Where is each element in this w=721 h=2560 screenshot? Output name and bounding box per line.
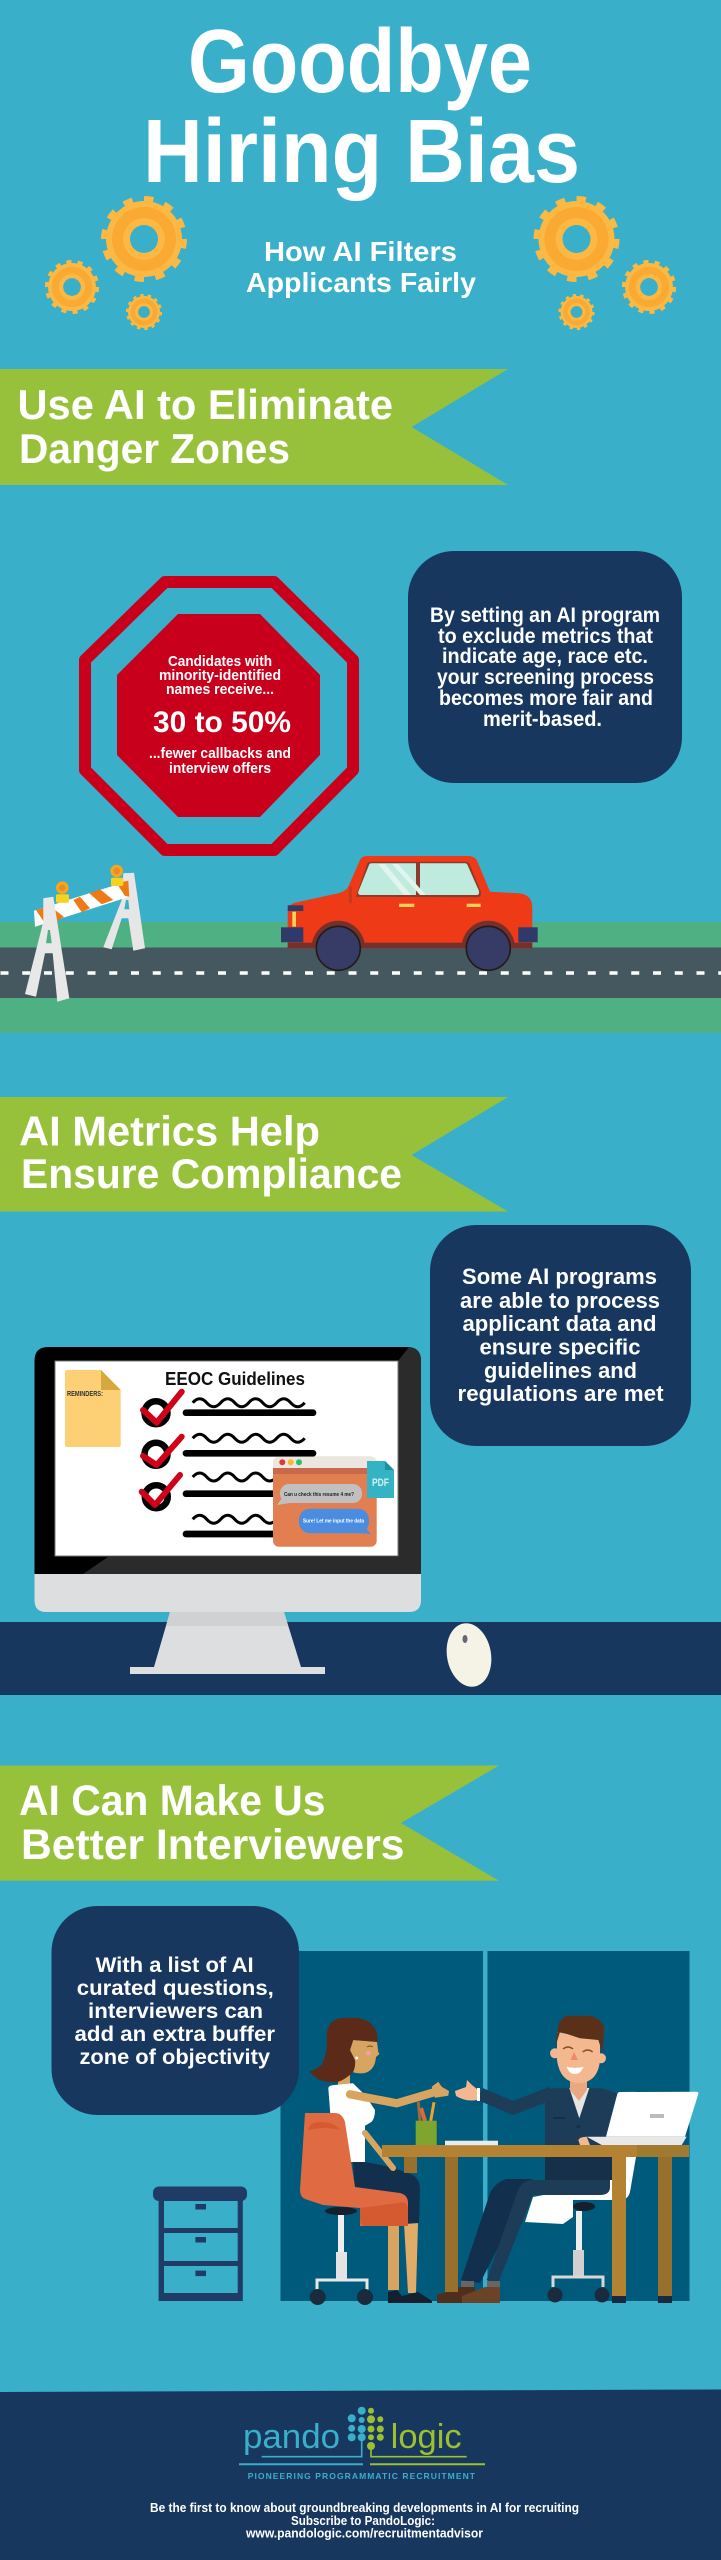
title: Hiring Bias	[143, 102, 580, 202]
icon: PDF file: PDF	[372, 1477, 389, 1489]
footer call to action: Subscribe to PandoLogic:	[291, 2513, 435, 2528]
section 1 banner	[0, 369, 508, 485]
icon: PDF file	[367, 1461, 394, 1498]
section 3 banner	[0, 1766, 499, 1881]
icon: computer mouse	[442, 1620, 496, 1690]
icon: pencil cup	[416, 2102, 437, 2145]
logo: pandologic: pando	[243, 2418, 340, 2456]
icon: car	[281, 856, 538, 970]
note: reminders: REMINDERS:	[67, 1391, 103, 1398]
illustration: desk	[382, 2141, 689, 2303]
chat window: Can u check this resume 4 me?	[284, 1492, 354, 1498]
panel: interview text box: With a list of AI	[96, 1954, 254, 1977]
desk band	[0, 1622, 721, 1695]
road scene background	[0, 922, 721, 1033]
stop sign callout: interview offers	[169, 760, 271, 777]
heading: EEOC Guidelines: EEOC Guidelines	[165, 1369, 305, 1389]
panel: AI compliance text box: regulations are met	[458, 1381, 664, 1406]
icon: filing cabinet	[153, 2186, 247, 2301]
panel: AI compliance text box	[430, 1225, 691, 1446]
section 2 banner: AI Metrics Help	[19, 1108, 320, 1154]
footer call to action: Be the first to know about groundbreaking developments in AI for recruiting	[150, 2500, 579, 2515]
title	[143, 12, 580, 202]
icon: small gear left	[47, 262, 97, 312]
stop sign callout: Candidates with	[168, 653, 272, 670]
subtitle: Applicants Fairly	[246, 267, 476, 298]
icon: tiny gear right	[560, 295, 593, 329]
panel: AI compliance text box: applicant data and	[462, 1311, 656, 1336]
icon: laptop	[578, 2092, 698, 2145]
panel: interview text box: add an extra buffer	[74, 2023, 275, 2046]
note: reminders	[65, 1370, 121, 1447]
icon: road barrier	[25, 865, 145, 1002]
icon: large gear right	[536, 199, 616, 279]
stop sign callout	[85, 582, 353, 850]
panel: interview text box: zone of objectivity	[80, 2046, 270, 2069]
panel: AI program text box	[408, 551, 682, 783]
panel: AI compliance text box: guidelines and	[484, 1358, 637, 1383]
icon: small gear right	[624, 262, 674, 312]
illustration: man on chair	[437, 2016, 636, 2303]
subtitle: How AI Filters	[264, 236, 457, 267]
panel: AI program text box: merit-based.	[483, 708, 602, 731]
panel: AI compliance text box: ensure specific	[480, 1334, 640, 1360]
panel: interview text box: curated questions,	[77, 1977, 274, 2000]
stop sign callout: names receive...	[166, 681, 274, 698]
stop sign callout: ...fewer callbacks and	[149, 745, 291, 762]
office room panel	[280, 1951, 690, 2301]
panel: AI compliance text box: Some AI programs	[462, 1264, 657, 1289]
checklist	[142, 1392, 313, 1534]
section 3 banner: Better Interviewers	[21, 1821, 404, 1869]
section 2 banner: Ensure Compliance	[21, 1150, 402, 1197]
logo: pandologic: logic	[391, 2418, 462, 2456]
section 2 banner	[0, 1097, 508, 1212]
panel: AI program text box: your screening process	[437, 666, 654, 689]
title: Goodbye	[188, 12, 532, 112]
footer call to action	[150, 2500, 579, 2541]
subtitle	[246, 236, 476, 298]
illustration: woman on chair	[300, 2018, 449, 2305]
panel: interview text box	[52, 1906, 299, 2115]
panel: AI program text box: indicate age, race etc.	[442, 645, 648, 668]
stop sign callout: 30 to 50%	[153, 706, 291, 739]
chat window: Sure! Let me input the data	[303, 1519, 364, 1525]
icon: large gear left	[104, 199, 184, 279]
panel: AI compliance text box: are able to process	[460, 1288, 660, 1313]
panel: interview text box: interviewers can	[88, 2000, 263, 2023]
icon: tiny gear left	[127, 295, 161, 329]
panel: AI program text box: becomes more fair and	[439, 687, 653, 710]
panel: AI program text box: By setting an AI program	[430, 604, 660, 627]
stop sign callout: minority-identified	[159, 667, 281, 684]
section 3 banner: AI Can Make Us	[19, 1777, 326, 1825]
logo: pandologic: PIONEERING PROGRAMMATIC RECRUITMENT	[248, 2471, 476, 2481]
footer call to action: www.pandologic.com/recruitmentadvisor	[245, 2526, 483, 2541]
section 1 banner: Danger Zones	[19, 425, 290, 472]
footer panel	[0, 2390, 721, 2560]
icon: monitor	[34, 1347, 421, 1674]
logo: pandologic	[239, 2407, 485, 2481]
section 1 banner: Use AI to Eliminate	[18, 381, 393, 428]
panel: AI program text box: to exclude metrics that	[438, 625, 653, 648]
chat window	[273, 1457, 377, 1547]
